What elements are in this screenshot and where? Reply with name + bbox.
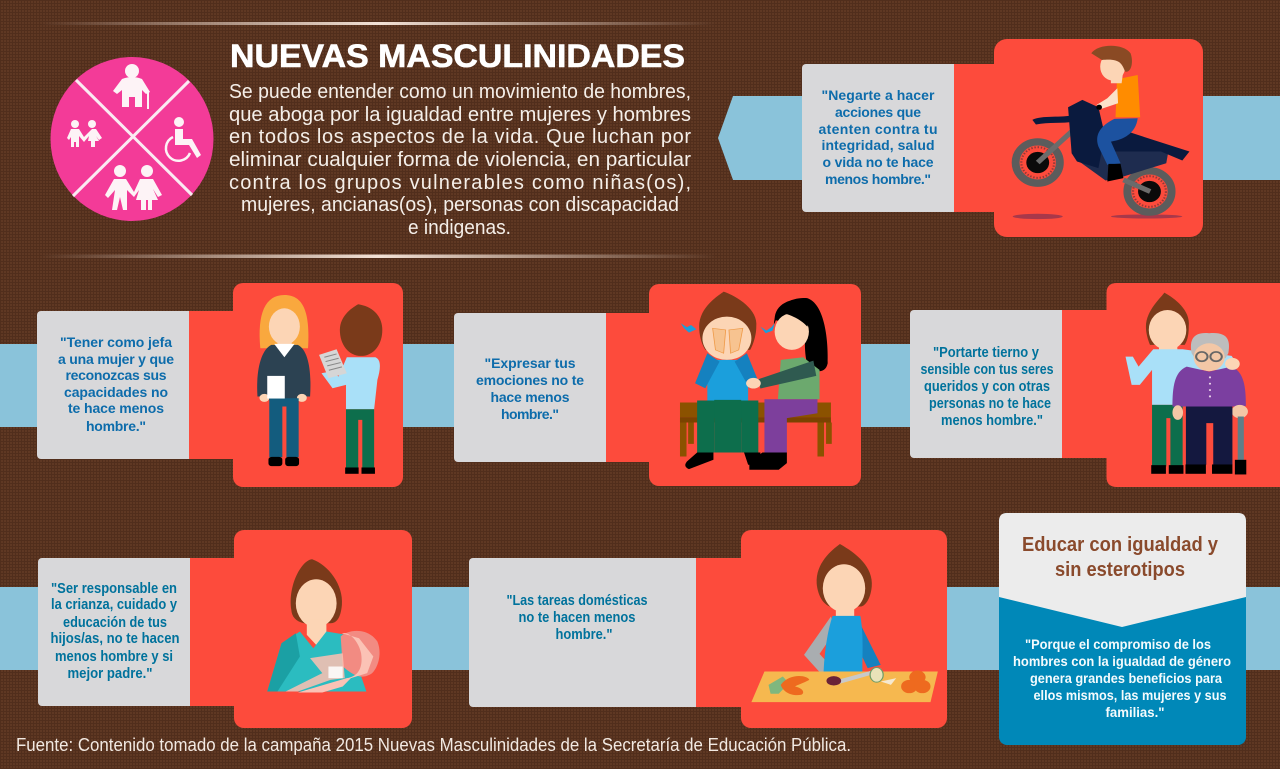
panel: motorbike card (802, 39, 1203, 237)
text: motorbike quote: acciones que (835, 104, 921, 120)
text: parenting quote: hijos/as, no te hacen (50, 630, 180, 647)
illustration: man with elderly person (1126, 293, 1248, 474)
panel: female boss card (37, 283, 403, 487)
text: parenting quote: la crianza, cuidado y (51, 596, 178, 613)
text: female boss quote: capacidades no (64, 384, 168, 400)
text: female boss quote: te hace menos (68, 400, 164, 416)
text: education quote: genera grandes beneficios para (1030, 670, 1222, 686)
heading: education: sin esterotipos (1055, 559, 1185, 581)
text: female boss quote: reconozcas sus (66, 367, 167, 383)
text: motorbike quote: "Negarte a hacer (822, 87, 935, 103)
text block: definition: e indigenas. (408, 217, 511, 239)
text block: definition: Se puede entender como un movimiento de hombres, (229, 81, 691, 103)
text: tenderness quote: sensible con tus seres (920, 361, 1054, 378)
panel: tenderness card (910, 283, 1280, 487)
text block: definition: en todos los aspectos de la vida. Que luchan por (229, 126, 691, 148)
text block: definition (229, 81, 691, 239)
band: middle row (0, 344, 1280, 427)
band: top arrow (718, 96, 1280, 180)
icon: children (67, 120, 102, 147)
text: motorbike quote (818, 87, 938, 187)
title: NUEVAS MASCULINIDADES (230, 38, 685, 74)
band: bottom row (0, 587, 1280, 670)
text: female boss quote (58, 334, 174, 434)
text: education quote: "Porque el compromiso de los (1025, 636, 1211, 652)
text: tenderness quote: personas no te hace (929, 395, 1051, 412)
text: tenderness quote: "Portarte tierno y (933, 344, 1040, 361)
text: housework quote: "Las tareas domésticas (506, 592, 648, 609)
illustration: person cooking (751, 544, 938, 702)
text: parenting quote: menos hombre y si (55, 648, 173, 665)
text: housework quote: no te hacen menos (518, 609, 636, 626)
text: tenderness quote: menos hombre." (941, 412, 1043, 429)
text: housework quote (506, 592, 648, 643)
icon: vulnerable groups circle (50, 57, 214, 221)
icon: couple (105, 165, 162, 210)
text: emotions quote: hace menos (490, 389, 570, 405)
text: education quote (1013, 636, 1231, 720)
text block: definition: que aboga por la igualdad entre mujeres y hombres (229, 104, 691, 126)
text: female boss quote: "Tener como jefa (60, 334, 172, 350)
text block: definition: eliminar cualquier forma de violencia, en particular (229, 149, 691, 171)
text: motorbike quote: integridad, salud (822, 137, 934, 153)
text: emotions quote: "Expresar tus (484, 355, 576, 371)
text: parenting quote: "Ser responsable en (51, 580, 177, 597)
text: parenting quote: educación de tus (63, 614, 167, 631)
illustration: crying man on bench (680, 292, 832, 470)
text: motorbike quote: atenten contra tu (818, 121, 938, 137)
text: female boss quote: hombre." (86, 418, 146, 434)
text: education quote: familias." (1106, 704, 1164, 720)
panel: parenting card (38, 530, 412, 728)
icon: elderly person (113, 64, 150, 109)
text: parenting quote: mejor padre." (68, 665, 152, 682)
text: tenderness quote (920, 344, 1054, 429)
text: emotions quote: hombre." (501, 406, 559, 422)
text: emotions quote: emociones no te (476, 372, 584, 388)
text: female boss quote: a una mujer y que (58, 351, 174, 367)
text: parenting quote (50, 580, 180, 682)
text: tenderness quote: queridos y con otras (924, 378, 1050, 395)
illustration: boss and employee (257, 295, 382, 474)
text: motorbike quote: menos hombre." (825, 171, 931, 187)
text: education quote: ellos mismos, las mujeres y sus (1034, 687, 1227, 703)
source note: Fuente: Contenido tomado de la campaña 2015 Nuevas Masculinidades de la Secretaría de Educación Pública. (16, 735, 851, 755)
panel: emotions card (454, 284, 861, 486)
text: emotions quote (476, 355, 584, 422)
heading: education: Educar con igualdad y (1022, 534, 1219, 556)
text block: definition: mujeres, ancianas(os), personas con discapacidad (241, 194, 679, 216)
text: housework quote: hombre." (556, 626, 612, 643)
panel: education callout (999, 513, 1246, 745)
illustration: man on motorbike (1013, 46, 1189, 219)
text block: definition: contra los grupos vulnerables como niñas(os), (229, 172, 691, 194)
text: education quote: hombres con la igualdad de género (1013, 653, 1231, 669)
icon: wheelchair (166, 117, 201, 161)
panel: housework card (469, 530, 947, 728)
illustration: parent holding baby (267, 559, 380, 692)
text: motorbike quote: o vida no te hace (822, 154, 934, 170)
heading: education (1022, 534, 1219, 581)
